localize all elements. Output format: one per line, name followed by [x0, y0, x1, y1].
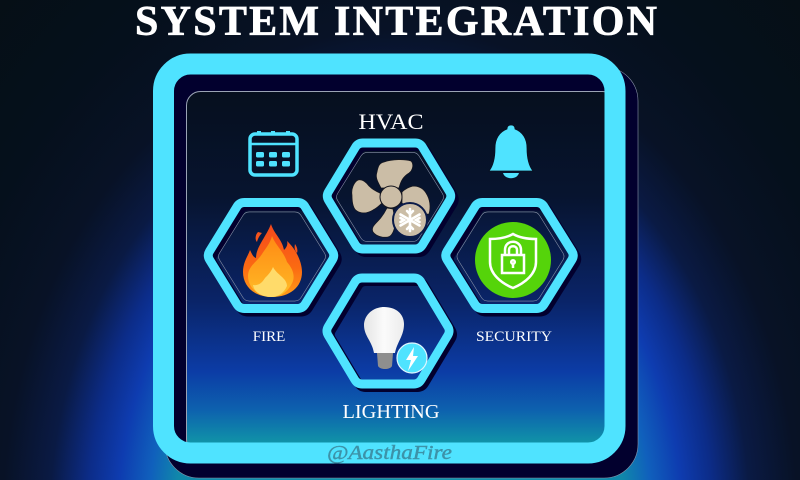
label: FIRE: FIRE	[253, 329, 285, 345]
title: SYSTEM INTEGRATION	[135, 0, 657, 45]
bulb screw base	[377, 353, 393, 369]
shield outline	[490, 234, 536, 288]
panel: inner screen	[186, 92, 616, 454]
bulb glass	[364, 307, 404, 353]
watermark: @AasthaFire	[327, 442, 452, 464]
icon: green shield with padlock	[475, 222, 551, 298]
hexagon: fire	[208, 202, 337, 312]
fan hub	[380, 186, 402, 208]
icon: flame	[243, 224, 302, 297]
label: LIGHTING: LIGHTING	[342, 401, 440, 423]
snowflake	[400, 209, 420, 231]
panel: cyan frame	[164, 64, 615, 453]
icon: fan with snowflake	[352, 160, 430, 237]
icon: bell	[489, 125, 533, 178]
bolt badge	[397, 343, 427, 373]
snowflake badge	[393, 203, 427, 237]
icon: calendar	[250, 131, 297, 175]
icon: light bulb with bolt	[364, 307, 427, 373]
label: HVAC: HVAC	[358, 109, 424, 134]
hexagon: lighting	[327, 278, 453, 388]
bolt	[406, 347, 418, 371]
padlock	[502, 242, 524, 273]
hexagon: HVAC	[327, 143, 454, 252]
fan blades	[352, 160, 430, 237]
hexagon: security	[446, 202, 577, 312]
panel: dark frame shadow	[165, 67, 638, 478]
label: SECURITY: SECURITY	[476, 329, 552, 345]
